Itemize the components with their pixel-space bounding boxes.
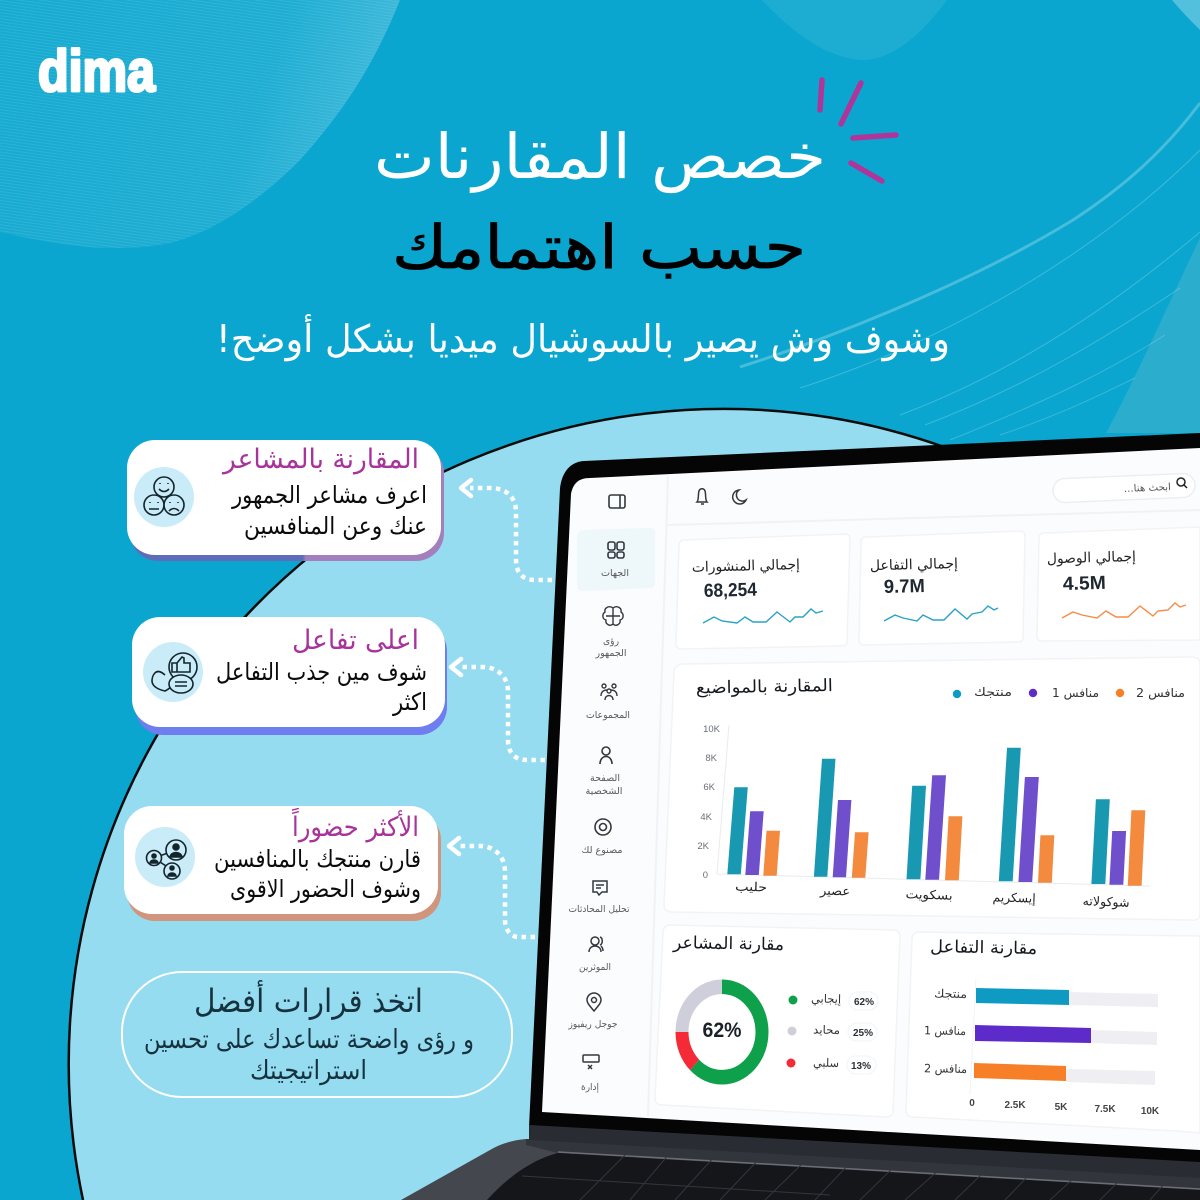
sidebar menu: [568, 528, 655, 1093]
sidebar menu: الجهات: [601, 568, 629, 579]
card text: [214, 845, 421, 903]
menu icon: influencers: [589, 937, 603, 952]
card text: شوف مين جذب التفاعل: [216, 658, 427, 686]
bar chart: 8K: [705, 753, 718, 764]
donut legend: 62%: [854, 996, 875, 1008]
laptop hinge: [529, 1125, 1200, 1178]
donut value: 62%: [702, 1019, 742, 1042]
laptop: [401, 433, 1200, 1200]
legend: منتجك: [974, 685, 1012, 699]
stat card: total posts: 68,254: [704, 580, 757, 602]
stat card: total engagement: إجمالي التفاعل: [870, 556, 958, 574]
card text: وشوف الحضور الاقوى: [230, 875, 421, 903]
sidebar menu: تحليل المحادثات: [568, 904, 630, 915]
sidebar menu: الصفحة: [590, 773, 620, 784]
laptop base and keyboard: [401, 1139, 1200, 1200]
menu icon: admin: [583, 1055, 599, 1069]
horizontal bar chart: منافس 1: [924, 1023, 966, 1039]
panel: sentiment comparison: [655, 925, 900, 1117]
menu icon: grid: [608, 542, 624, 558]
donut legend: سلبي: [813, 1056, 839, 1070]
circle outline: [69, 409, 1000, 1200]
topbar: [609, 473, 1195, 508]
bar chart: [697, 724, 1150, 911]
stat card: total reach: [1037, 527, 1200, 641]
card heading: اعلى تفاعل: [292, 625, 419, 656]
icon: moon: [733, 490, 746, 504]
bar chart: حليب: [735, 878, 767, 895]
panel title: مقارنة التفاعل: [930, 937, 1037, 959]
card text: قارن منتجك بالمنافسين: [214, 845, 421, 873]
horizontal bar chart: منافس 2: [924, 1061, 967, 1077]
title line 2: حسب اهتمامك: [392, 213, 806, 283]
stat card: total posts: إجمالي المنشورات: [692, 557, 800, 576]
laptop bezel: [529, 433, 1200, 1164]
horizontal bar chart: 0: [969, 1098, 975, 1109]
background swoosh: top left: [0, 0, 400, 248]
panel: engagement comparison: [906, 932, 1200, 1133]
icon: sidebar toggle: [609, 495, 625, 508]
stat card: total engagement: 9.7M: [884, 576, 925, 598]
search box: [1053, 473, 1195, 503]
active menu tile: [577, 528, 655, 591]
panel title: مقارنة المشاعر: [672, 933, 784, 955]
menu icon: groups: [601, 684, 617, 700]
donut legend: إيجابي: [811, 991, 841, 1006]
sparkline: [1062, 603, 1186, 618]
donut chart: [682, 987, 762, 1077]
sidebar menu: المجموعات: [586, 710, 630, 721]
background swoosh: top right: [740, 0, 1200, 440]
menu icon: chat: [593, 881, 607, 895]
sidebar divider and topbar divider: [648, 476, 1200, 1116]
stat card: total reach: 4.5M: [1063, 573, 1106, 595]
callout: better decisions: [122, 972, 512, 1097]
logo: dima: [38, 39, 156, 104]
legend: منافس 1: [1052, 686, 1099, 701]
stat card: total posts: [676, 534, 850, 649]
horizontal bar chart: 10K: [1141, 1106, 1160, 1117]
bar chart: 2K: [697, 841, 710, 852]
donut legend: [786, 991, 878, 1074]
card: top engagement: [132, 617, 447, 735]
search box: ابحث هنا...: [1124, 482, 1171, 495]
card heading: المقارنة بالمشاعر: [221, 444, 419, 475]
donut legend: محايد: [813, 1023, 840, 1037]
sidebar menu: مصنوع لك: [582, 845, 622, 856]
bar chart: 10K: [703, 724, 721, 735]
bar chart: شوكولاته: [1082, 893, 1130, 911]
panel: topic comparison: [664, 657, 1200, 920]
card text: [231, 481, 427, 540]
stat card: total engagement: [859, 531, 1025, 645]
bar chart: 0: [703, 870, 708, 881]
stat card: total reach: إجمالي الوصول: [1047, 549, 1136, 567]
menu icon: brain: [603, 607, 623, 625]
arrow: presence: [449, 838, 535, 937]
sidebar menu: جوجل ريفيوز: [568, 1019, 618, 1030]
bar chart: إيسكريم: [992, 889, 1036, 907]
horizontal bar chart: 2.5K: [1004, 1100, 1026, 1111]
card text: [216, 658, 427, 716]
card: sentiment comparison: [127, 440, 444, 561]
callout: better decisions: استراتيجيتك: [250, 1056, 367, 1086]
card heading: الأكثر حضوراً: [291, 807, 419, 843]
card text: عنك وعن المنافسين: [244, 512, 427, 540]
arrow: sentiment: [461, 480, 552, 580]
bar chart: 6K: [703, 782, 716, 793]
menu icon: person: [600, 747, 612, 764]
icon: network of people: [135, 827, 195, 887]
sparkline: [703, 609, 823, 623]
sidebar menu: الجمهور: [595, 648, 626, 659]
card text: اعرف مشاعر الجمهور: [231, 481, 427, 509]
sidebar menu: إدارة: [581, 1082, 599, 1093]
bar chart: بسكويت: [905, 886, 953, 904]
menu icon: made for you: [595, 819, 611, 835]
donut legend: 13%: [851, 1060, 872, 1072]
card text: اكثر: [392, 688, 427, 716]
legend: منافس 2: [1136, 686, 1185, 701]
callout: better decisions: اتخذ قرارات أفضل: [194, 980, 423, 1020]
legend: [953, 685, 1185, 701]
sidebar menu: الموثرين: [579, 962, 611, 973]
horizontal bar chart: منتجك: [934, 986, 967, 1001]
sparkline: [884, 606, 998, 621]
menu icon: location pin: [587, 993, 601, 1011]
icon: magenta spark: [820, 80, 896, 181]
sidebar menu: الشخصية: [586, 786, 622, 797]
horizontal bar chart: 7.5K: [1094, 1104, 1116, 1115]
donut legend: 25%: [853, 1027, 874, 1039]
light blue circle: [69, 409, 1200, 1200]
horizontal bar chart: 5K: [1055, 1102, 1068, 1113]
laptop screen: [542, 448, 1200, 1150]
card: strongest presence: [124, 806, 441, 921]
arrow: engagement: [451, 659, 545, 760]
icon: like and heart: [143, 642, 203, 702]
bar chart: عصير: [819, 882, 850, 900]
title line 1: خصص المقارنات: [374, 120, 826, 193]
panel title: المقارنة بالمواضيع: [696, 676, 833, 698]
subtitle: وشوف وش يصير بالسوشيال ميديا بشكل أوضح!: [216, 314, 950, 362]
callout: better decisions: و رؤى واضحة تساعدك على تحسين: [144, 1025, 474, 1055]
icon: bell: [697, 489, 707, 504]
bar chart: 4K: [700, 812, 713, 823]
sidebar menu: رؤى: [603, 636, 619, 647]
icon: faces: [134, 467, 194, 527]
horizontal bar chart: [924, 978, 1160, 1117]
